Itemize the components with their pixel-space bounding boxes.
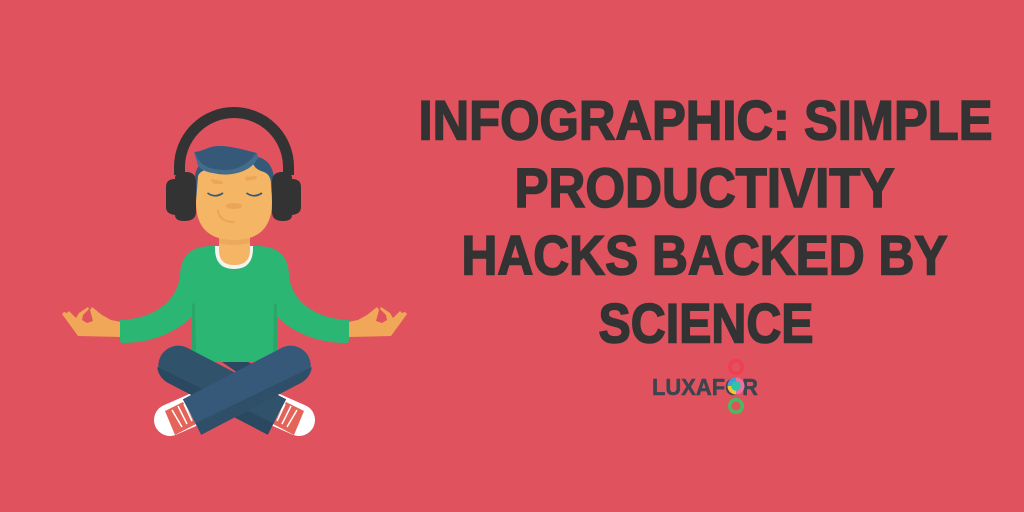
hair top	[195, 146, 256, 170]
eyebrows	[211, 176, 257, 184]
title	[418, 88, 992, 354]
white collar	[215, 246, 253, 269]
green sweater	[120, 246, 349, 362]
closed eyes	[208, 193, 262, 196]
neck shadow	[219, 232, 250, 245]
wordmark: LUXAFOR	[652, 374, 758, 400]
right shoe	[273, 402, 304, 435]
smile	[218, 210, 234, 222]
back hair	[195, 155, 274, 198]
front leg	[183, 346, 312, 435]
title: HACKS BACKED BY	[462, 224, 948, 286]
left ear cup	[166, 172, 196, 221]
back leg	[157, 346, 286, 435]
right ear cup	[272, 172, 301, 221]
illustration: meditating man with headphones	[62, 113, 407, 435]
green ring	[730, 400, 742, 412]
hair fringe	[194, 146, 258, 174]
sweater fold shading	[192, 303, 277, 352]
face	[196, 163, 272, 240]
multicolour ring	[728, 378, 744, 394]
icon: right hand	[348, 307, 407, 337]
neck	[219, 232, 250, 265]
title: PRODUCTIVITY	[514, 156, 894, 219]
left shoe	[165, 402, 196, 435]
title: SCIENCE	[598, 292, 814, 354]
icon: left hand	[62, 307, 121, 337]
nose	[226, 203, 242, 209]
red ring	[730, 361, 742, 373]
headphone band	[180, 113, 288, 175]
logo: Luxafor	[652, 361, 758, 412]
